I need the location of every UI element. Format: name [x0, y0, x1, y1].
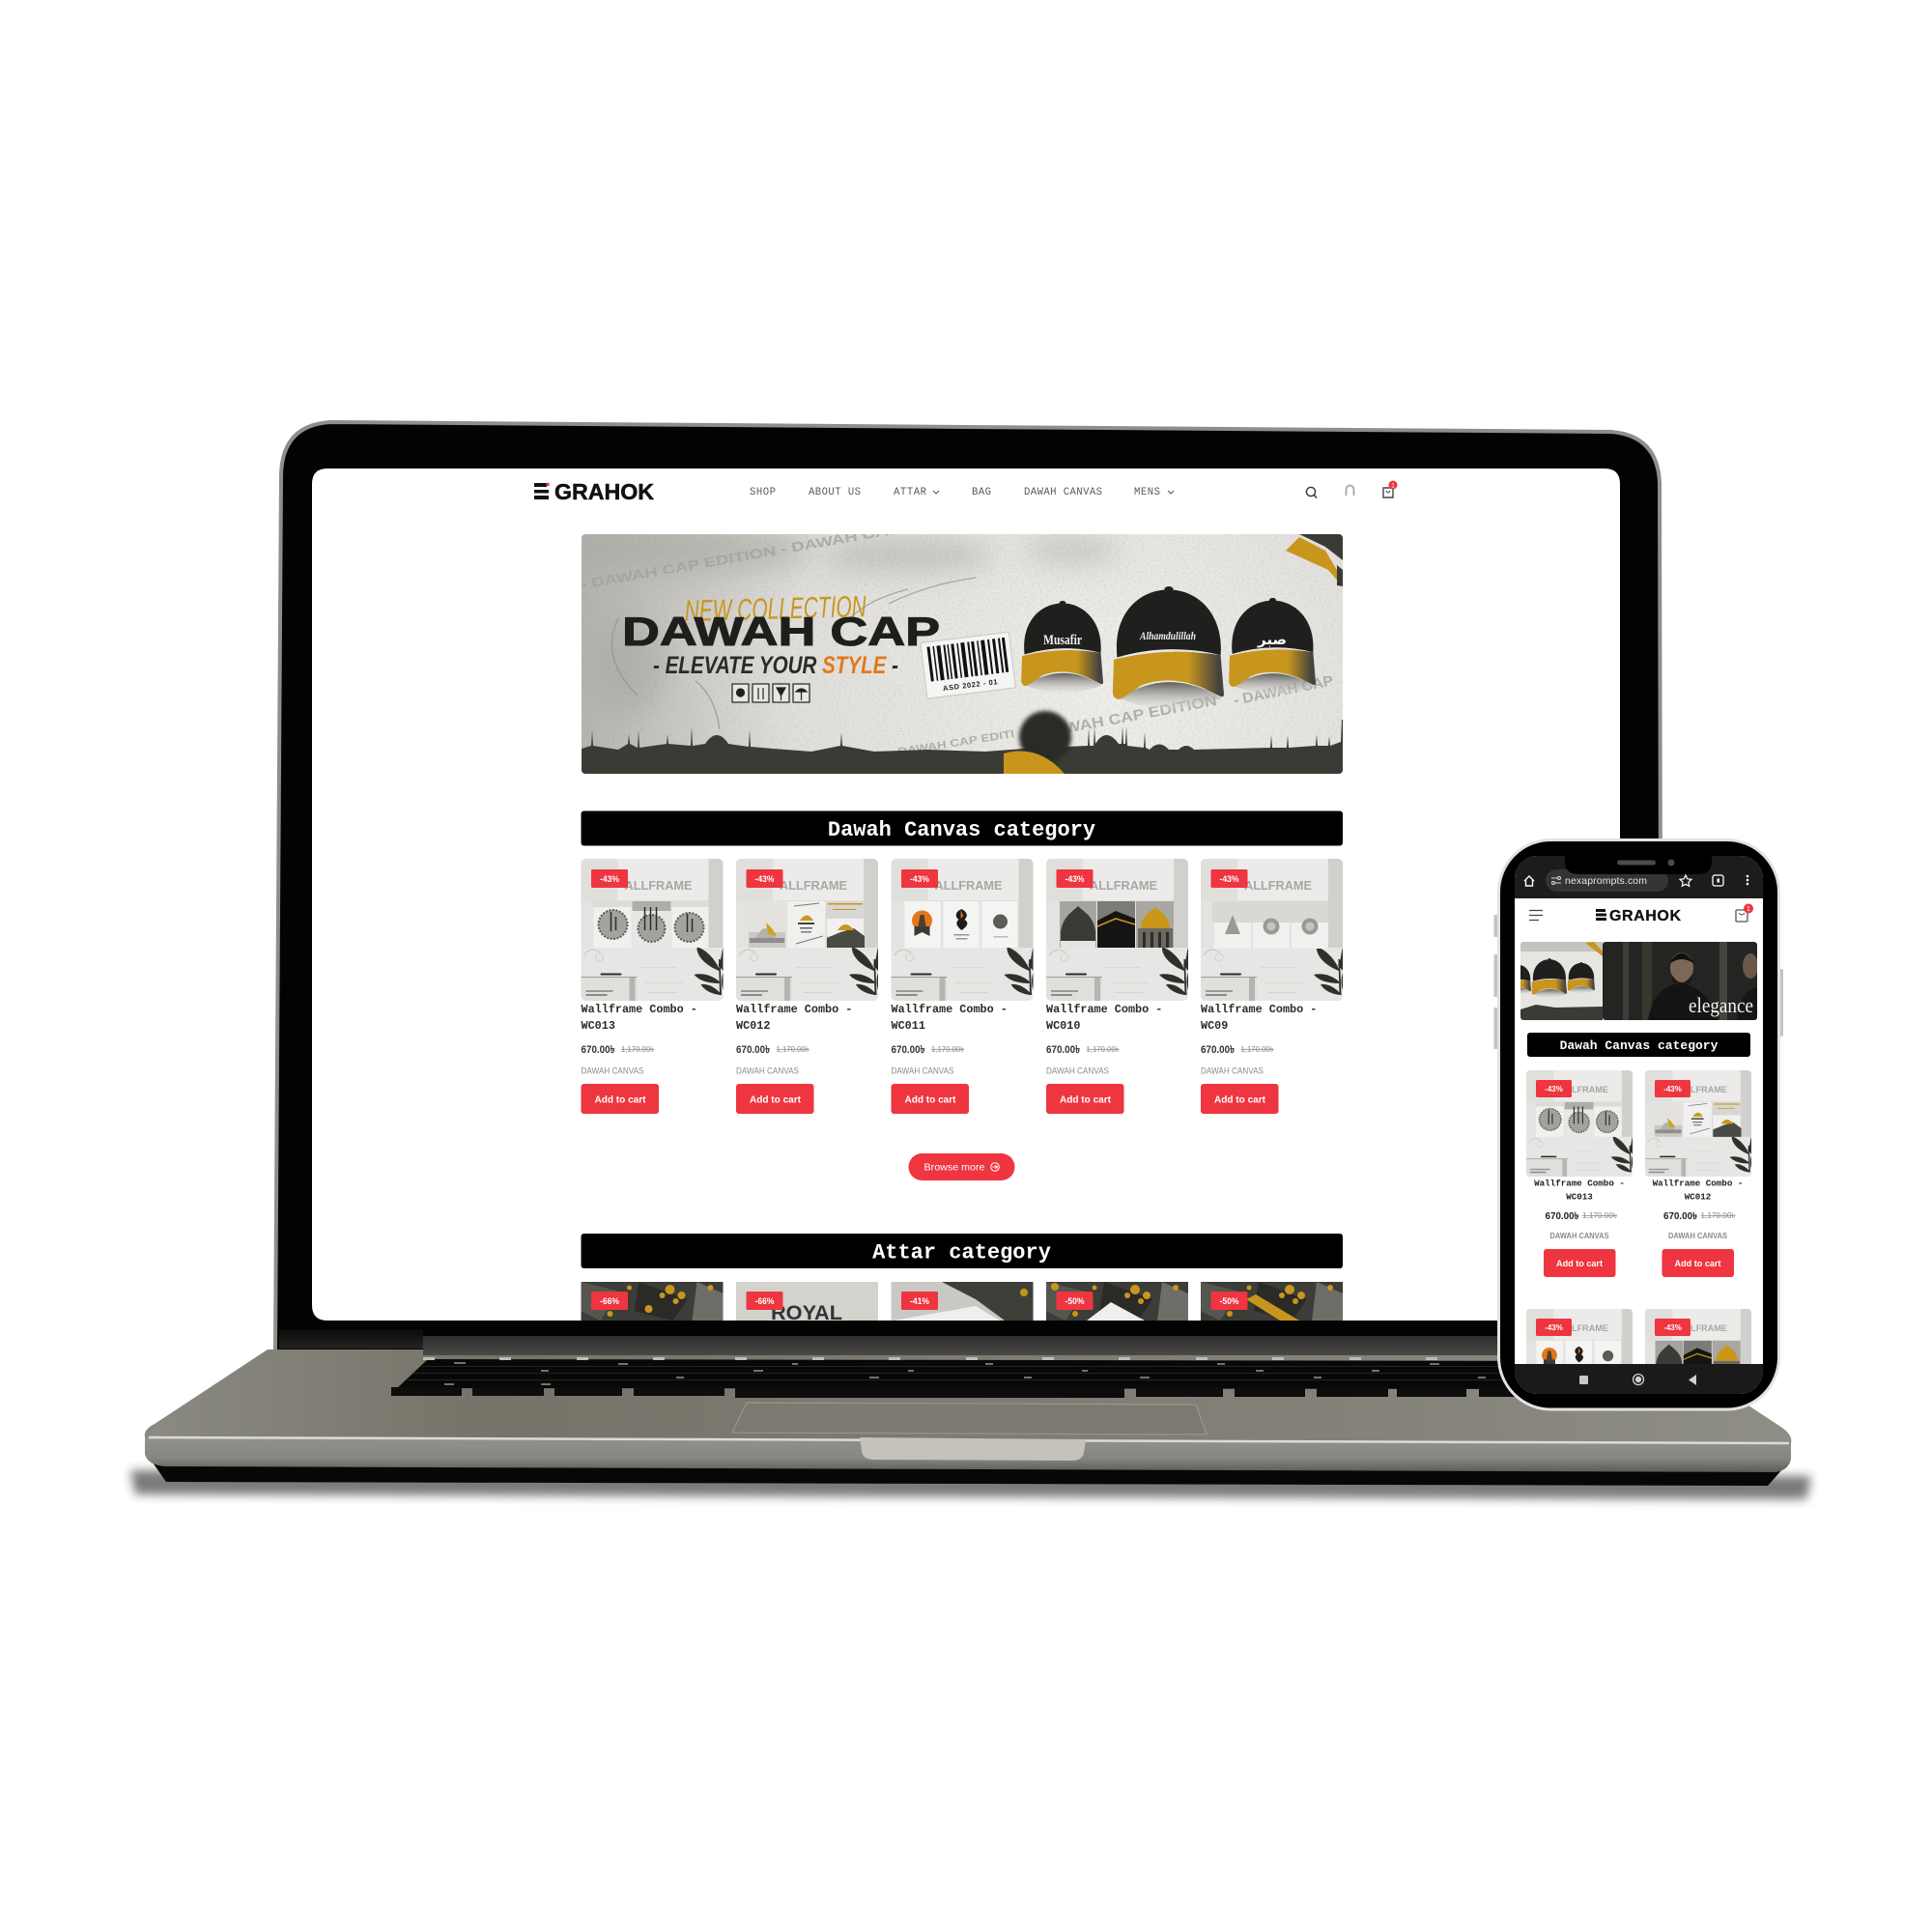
product card: WC011: Add to cart — [904, 1094, 956, 1105]
product card: WC010: ALLFRAME — [1090, 879, 1157, 893]
trackpad — [732, 1403, 1207, 1435]
phone product card: WC013: DAWAH CANVAS — [1549, 1232, 1609, 1240]
phone product card: WC011 partial: LFRAME — [1572, 1323, 1608, 1334]
hinge strip — [423, 1336, 1582, 1355]
product card: WC012: WC012 — [736, 1019, 770, 1033]
section heading — [582, 811, 1343, 846]
phone product card: WC012: LFRAME — [1690, 1085, 1727, 1095]
phone product card: WC013: WC013 — [1566, 1192, 1593, 1202]
icon: tabs — [1713, 875, 1723, 886]
icon: user — [1347, 485, 1354, 496]
cap: Alhamdulillah — [1113, 586, 1224, 709]
phone product card: WC013: -43% — [1545, 1085, 1563, 1094]
phone — [1493, 840, 1783, 1415]
product card: WC013: 1,170.00৳ — [621, 1044, 655, 1054]
product card: WC013: ALLFRAME — [624, 879, 692, 893]
product card: WC010: 670.00৳ — [1046, 1044, 1080, 1056]
product card: WC09: 1,170.00৳ — [1240, 1044, 1274, 1054]
navigation menu: SHOP — [750, 487, 776, 498]
attar card 1 — [582, 1282, 723, 1321]
phone section heading — [1527, 1033, 1750, 1057]
browse more button: Browse more — [923, 1161, 985, 1173]
banner watermark text — [580, 521, 1335, 758]
product card: WC011: ALLFRAME — [935, 879, 1003, 893]
section heading: Dawah Canvas category — [828, 818, 1095, 842]
product card: WC011 — [891, 859, 1034, 1114]
product card: WC011: 1,170.00৳ — [931, 1044, 965, 1054]
phone product card: WC010 partial: LFRAME — [1690, 1323, 1727, 1334]
icon: search — [1306, 487, 1317, 498]
product card: WC010 — [1046, 859, 1188, 1114]
phone logo: GRAHOK — [1609, 908, 1681, 924]
url pill: nexaprompts.com — [1565, 875, 1647, 887]
banner shadows — [602, 534, 1119, 709]
section: Dawah Canvas category — [582, 811, 1343, 1180]
product card: WC013: Wallframe Combo - — [582, 1003, 697, 1016]
product card: WC09: ALLFRAME — [1244, 879, 1312, 893]
banner wrinkles — [611, 578, 976, 729]
product card: WC012: 1,170.00৳ — [777, 1044, 810, 1054]
phone product card: WC012: 670.00৳ — [1663, 1211, 1697, 1222]
product card: WC011: WC011 — [891, 1019, 925, 1033]
phone product card: WC013: 670.00৳ — [1546, 1211, 1579, 1222]
phone product card: WC011 partial: -43% — [1545, 1323, 1563, 1332]
attar card 2: ROYAL — [771, 1302, 842, 1324]
phone banner: elegance — [1689, 993, 1753, 1017]
icon: menu dots — [1747, 875, 1748, 885]
product card: WC012: 670.00৳ — [736, 1044, 770, 1056]
product card: WC012: Add to cart — [750, 1094, 801, 1105]
phone body — [1499, 840, 1779, 1409]
cap: Musafir: Musafir — [1043, 633, 1082, 648]
banner watermark text: - DAWAH CAP EDITION - DAWAH CAP — [580, 521, 900, 592]
banner title: DAWAH CAP — [622, 609, 940, 654]
navigation menu: DAWAH CANVAS — [1024, 487, 1102, 498]
url pill — [1546, 869, 1668, 892]
product card: WC09: Wallframe Combo - — [1201, 1003, 1317, 1016]
product card: WC09: -43% — [1219, 874, 1238, 884]
icon: star — [1680, 875, 1691, 886]
icon: hamburger menu — [1529, 910, 1543, 920]
product card: WC010: 1,170.00৳ — [1086, 1044, 1120, 1054]
logo: GRAHOK — [554, 479, 654, 504]
product card: WC013: WC013 — [582, 1019, 615, 1033]
product card: WC011: 670.00৳ — [891, 1044, 925, 1056]
product card: WC013: -43% — [600, 874, 619, 884]
lid silver edge — [275, 422, 1662, 1350]
attar card 5: -50% — [1219, 1296, 1238, 1306]
browser bar — [1515, 856, 1763, 898]
attar card 3 — [891, 1282, 1034, 1321]
thumb notch — [860, 1437, 1086, 1461]
product card: WC09 — [1201, 859, 1343, 1114]
product card: WC012: ALLFRAME — [780, 879, 847, 893]
icon: phone cart: 1 — [1747, 906, 1750, 913]
attar card 2: -66% — [755, 1296, 775, 1306]
cap: Musafir — [1021, 601, 1103, 694]
navigation menu: ABOUT US — [809, 487, 861, 498]
phone notch — [1565, 850, 1712, 874]
product card: WC012: DAWAH CANVAS — [736, 1066, 799, 1076]
cap: Sabr: صبر — [1257, 631, 1287, 648]
icon: phone cart — [1736, 904, 1753, 922]
product card: WC012: Wallframe Combo - — [736, 1003, 852, 1016]
phone section heading: Dawah Canvas category — [1560, 1038, 1719, 1053]
attar card 3: -41% — [910, 1296, 929, 1306]
product card: WC011: DAWAH CANVAS — [891, 1066, 954, 1076]
phone product card: WC012 — [1645, 1070, 1751, 1277]
navigation menu: MENS — [1134, 487, 1160, 498]
laptop — [130, 422, 1811, 1499]
android navigation bar — [1515, 1364, 1763, 1394]
phone product card: WC012: DAWAH CANVAS — [1668, 1232, 1728, 1240]
hinge shadow left — [279, 1329, 423, 1349]
product card: WC010: WC010 — [1046, 1019, 1080, 1033]
phone product card: WC013 — [1526, 1070, 1633, 1277]
attar card 1: -66% — [600, 1296, 619, 1306]
barcode label: ASD 2022 - 01 — [943, 677, 999, 693]
product card: WC012: -43% — [755, 874, 775, 884]
phone screen — [1505, 850, 1763, 1415]
phone product card: WC012: 1,170.00৳ — [1700, 1211, 1735, 1220]
phone banner — [1505, 942, 1758, 1020]
laptop base shadow — [130, 1470, 1811, 1499]
product card: WC09: DAWAH CANVAS — [1201, 1066, 1264, 1076]
phone product card: WC012: -43% — [1663, 1085, 1682, 1094]
product card: WC010: Add to cart — [1060, 1094, 1111, 1105]
cap: Alhamdulillah: Alhamdulillah — [1139, 629, 1196, 642]
phone product card: WC012: WC012 — [1685, 1192, 1711, 1202]
icon: cart with badge — [1383, 481, 1397, 497]
phone product card: WC013: LFRAME — [1572, 1085, 1608, 1095]
section: Attar category — [582, 1234, 1343, 1324]
banner subheading: new collection: NEW COLLECTION — [684, 589, 867, 628]
phone product card: WC012: Add to cart — [1675, 1259, 1721, 1269]
laptop screen — [312, 469, 1620, 1324]
navigation menu: ATTAR — [894, 487, 927, 498]
floating cap bottom — [1004, 711, 1071, 774]
product card: WC09: Add to cart — [1214, 1094, 1265, 1105]
product card: WC011: Wallframe Combo - — [891, 1003, 1008, 1016]
product card: WC010: -43% — [1065, 874, 1084, 884]
laptop base deck — [145, 1350, 1791, 1443]
product card: WC010: Wallframe Combo - — [1046, 1003, 1162, 1016]
navigation menu — [750, 487, 1175, 495]
icon: home — [1524, 876, 1534, 886]
caps — [1021, 586, 1316, 709]
phone product card: WC013: Wallframe Combo - — [1534, 1179, 1625, 1188]
phone product card: WC012: Wallframe Combo - — [1653, 1179, 1743, 1188]
phone product card: WC010 partial: -43% — [1663, 1323, 1682, 1332]
banner tagline: - ELEVATE YOUR STYLE - — [653, 652, 898, 679]
site header — [534, 481, 1397, 500]
product card: WC013: 670.00৳ — [582, 1044, 615, 1056]
banner watermark text: DAWAH CAP EDITI — [897, 728, 1015, 758]
section heading: Attar category — [872, 1240, 1051, 1265]
cap: Sabr — [1229, 598, 1316, 695]
banner watermark text: - DAWAH CAP — [1232, 672, 1335, 709]
laptop lid and bezel — [275, 422, 1662, 1350]
barcode label — [921, 632, 1015, 698]
section heading — [582, 1234, 1343, 1268]
product card: WC013: Add to cart — [595, 1094, 646, 1105]
city skyline silhouette — [582, 720, 1343, 774]
icon: cart with badge: 1 — [1391, 483, 1395, 489]
product card: WC010: DAWAH CANVAS — [1046, 1066, 1109, 1076]
product card: WC09: WC09 — [1201, 1019, 1228, 1033]
attar card 4 — [1046, 1282, 1188, 1321]
product card: WC013 — [582, 859, 723, 1114]
phone product card: WC010 partial — [1645, 1309, 1751, 1415]
floating cap top right — [1286, 534, 1343, 586]
product card: WC011: -43% — [910, 874, 929, 884]
phone side buttons — [1493, 915, 1783, 1049]
attar card 4: -50% — [1065, 1296, 1084, 1306]
laptop base underside — [153, 1463, 1783, 1486]
navigation menu: BAG — [972, 487, 991, 498]
phone product card: WC013: Add to cart — [1556, 1259, 1604, 1269]
logo — [534, 483, 655, 500]
attar card 2 — [736, 1282, 878, 1324]
hero banner — [580, 521, 1343, 774]
product card: WC09: 670.00৳ — [1201, 1044, 1235, 1056]
front highlight line — [149, 1437, 1789, 1443]
attar card 5 — [1201, 1282, 1343, 1321]
laptop base front edge — [145, 1436, 1791, 1472]
phone product card: WC011 partial — [1526, 1309, 1633, 1415]
phone product card: WC013: 1,170.00৳ — [1582, 1211, 1617, 1220]
keyboard — [391, 1357, 1671, 1398]
product card: WC012 — [736, 859, 878, 1114]
browse more button — [908, 1153, 1014, 1180]
packaging icons — [732, 684, 810, 702]
product card: WC013: DAWAH CANVAS — [582, 1066, 643, 1076]
banner watermark text: WAH CAP EDITION — [1064, 693, 1218, 737]
